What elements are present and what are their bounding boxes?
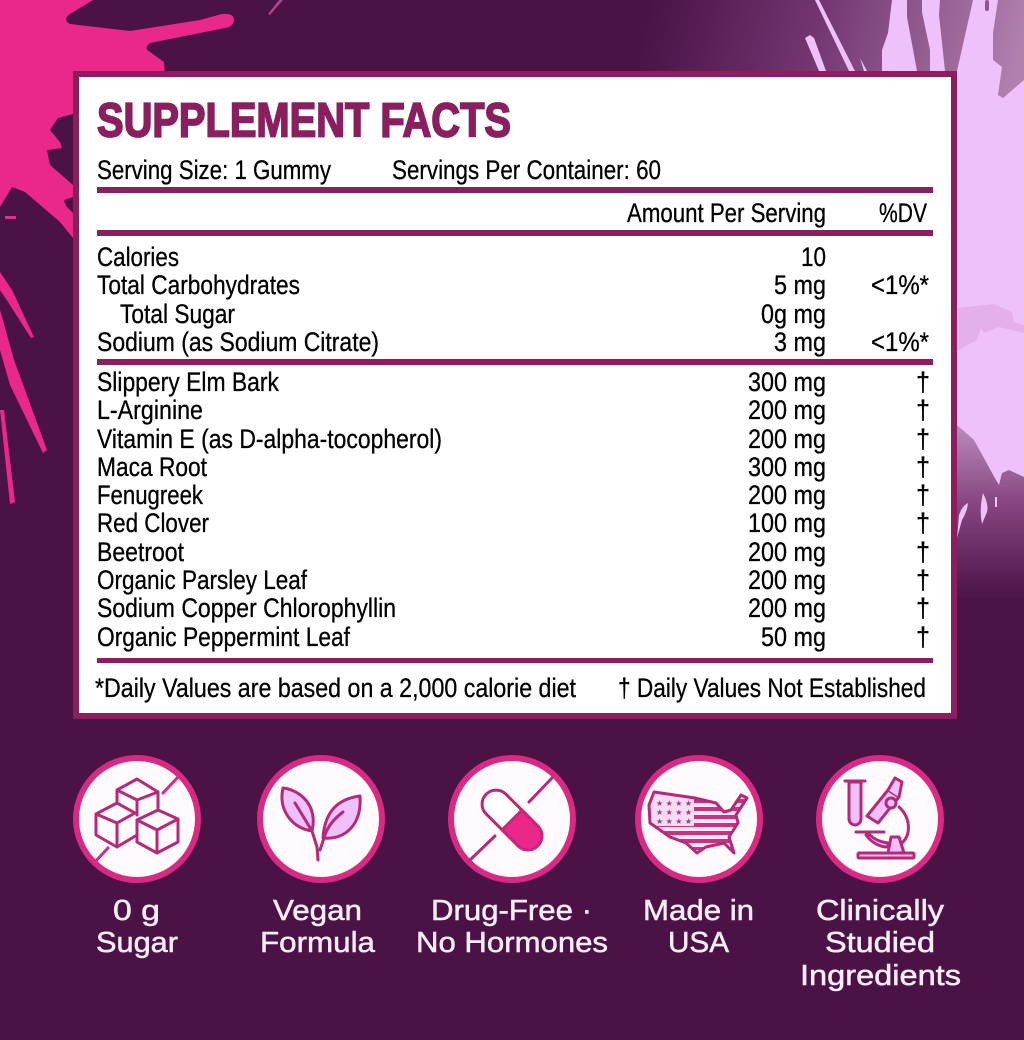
title: SUPPLEMENT FACTS: [97, 94, 511, 148]
label: Ingredients: [800, 960, 961, 992]
label: No Hormones: [416, 927, 608, 959]
label: Made in: [643, 895, 754, 927]
label: [96, 895, 178, 959]
serving info: Servings Per Container: 60: [392, 155, 661, 185]
serving info: Serving Size: 1 Gummy: [97, 155, 331, 185]
ingredient rows: †: [916, 593, 930, 623]
ingredient rows: 200 mg: [748, 537, 826, 567]
badge: 0 g sugar: [76, 758, 198, 959]
ingredient rows: †: [916, 395, 930, 425]
icon: sugar cubes: [94, 775, 180, 863]
ingredient rows: Organic Parsley Leaf: [97, 565, 307, 595]
ingredient rows: 200 mg: [748, 395, 826, 425]
footnotes: † Daily Values Not Established: [618, 673, 926, 703]
ingredient rows: [97, 367, 930, 652]
ingredient rows: Fenugreek: [97, 480, 203, 510]
badge: drug-free: [416, 758, 608, 959]
label: [800, 895, 961, 992]
ingredient rows: †: [916, 622, 930, 652]
ingredient rows: 300 mg: [748, 367, 826, 397]
icon: usa flag map: [645, 790, 755, 855]
ingredient rows: †: [916, 508, 930, 538]
nutrition rows: [97, 242, 929, 357]
nutrition rows: 5 mg: [774, 270, 826, 300]
ingredient rows: Red Clover: [97, 508, 209, 538]
label: [260, 895, 376, 959]
label: [416, 895, 608, 959]
nutrition rows: 3 mg: [774, 327, 826, 357]
ingredient rows: Sodium Copper Chlorophyllin: [97, 593, 396, 623]
ingredient rows: 200 mg: [748, 565, 826, 595]
label: Sugar: [96, 927, 178, 959]
ingredient rows: Beetroot: [97, 537, 184, 567]
label: Studied: [825, 927, 935, 959]
ingredient rows: †: [916, 367, 930, 397]
column headers: Amount Per Serving: [627, 198, 826, 228]
ingredient rows: L-Arginine: [97, 395, 203, 425]
nutrition rows: Total Carbohydrates: [97, 270, 300, 300]
nutrition rows: <1%*: [871, 327, 929, 357]
badge: vegan formula: [260, 758, 382, 959]
ingredient rows: 200 mg: [748, 424, 826, 454]
pink paint splash: [0, 0, 283, 504]
nutrition rows: <1%*: [871, 270, 929, 300]
lilac drips lower right: [957, 493, 997, 538]
panel: supplement facts: [76, 74, 954, 716]
dark paint lower right: [940, 425, 1024, 640]
ingredient rows: Maca Root: [97, 452, 207, 482]
badge: made in usa: [638, 758, 760, 959]
icon: capsule: [470, 778, 552, 860]
label: Drug-Free ·: [431, 895, 592, 927]
footnotes: [95, 673, 926, 703]
label: Clinically: [816, 895, 945, 927]
ingredient rows: †: [916, 452, 930, 482]
ingredient rows: Organic Peppermint Leaf: [97, 622, 350, 652]
nutrition rows: 10: [801, 242, 826, 272]
icon: usa flag map: ★★★★: [656, 808, 692, 817]
nutrition rows: Calories: [97, 242, 179, 272]
icon: usa flag map: ★★★★: [656, 799, 692, 808]
label: Formula: [260, 927, 376, 959]
nutrition rows: Sodium (as Sodium Citrate): [97, 327, 379, 357]
label: [643, 895, 754, 959]
ingredient rows: 300 mg: [748, 452, 826, 482]
label: Vegan: [273, 895, 362, 927]
column headers: %DV: [879, 198, 927, 228]
icon: test tube and microscope: [845, 778, 914, 858]
lilac smear: [957, 304, 1024, 350]
nutrition rows: Total Sugar: [120, 299, 235, 329]
icon: leaf sprout: [282, 788, 360, 860]
ingredient rows: †: [916, 424, 930, 454]
nutrition rows: 0g mg: [761, 299, 826, 329]
ingredient rows: Slippery Elm Bark: [97, 367, 279, 397]
footnotes: *Daily Values are based on a 2,000 calorie diet: [95, 673, 576, 703]
ingredient rows: 50 mg: [761, 622, 826, 652]
ingredient rows: 100 mg: [748, 508, 826, 538]
label: USA: [668, 927, 730, 959]
ingredient rows: 200 mg: [748, 593, 826, 623]
ingredient rows: 200 mg: [748, 480, 826, 510]
badge: clinically studied: [800, 758, 961, 992]
dark blobs over splash: [47, 114, 73, 213]
ingredient rows: Vitamin E (as D-alpha-tocopherol): [97, 424, 442, 454]
ingredient rows: †: [916, 537, 930, 567]
label: 0 g: [113, 895, 160, 927]
serving info: [97, 155, 661, 185]
lilac paint splash: [805, 0, 1024, 520]
ingredient rows: †: [916, 565, 930, 595]
ingredient rows: †: [916, 480, 930, 510]
icon: usa flag map: ★★★★: [656, 817, 692, 826]
